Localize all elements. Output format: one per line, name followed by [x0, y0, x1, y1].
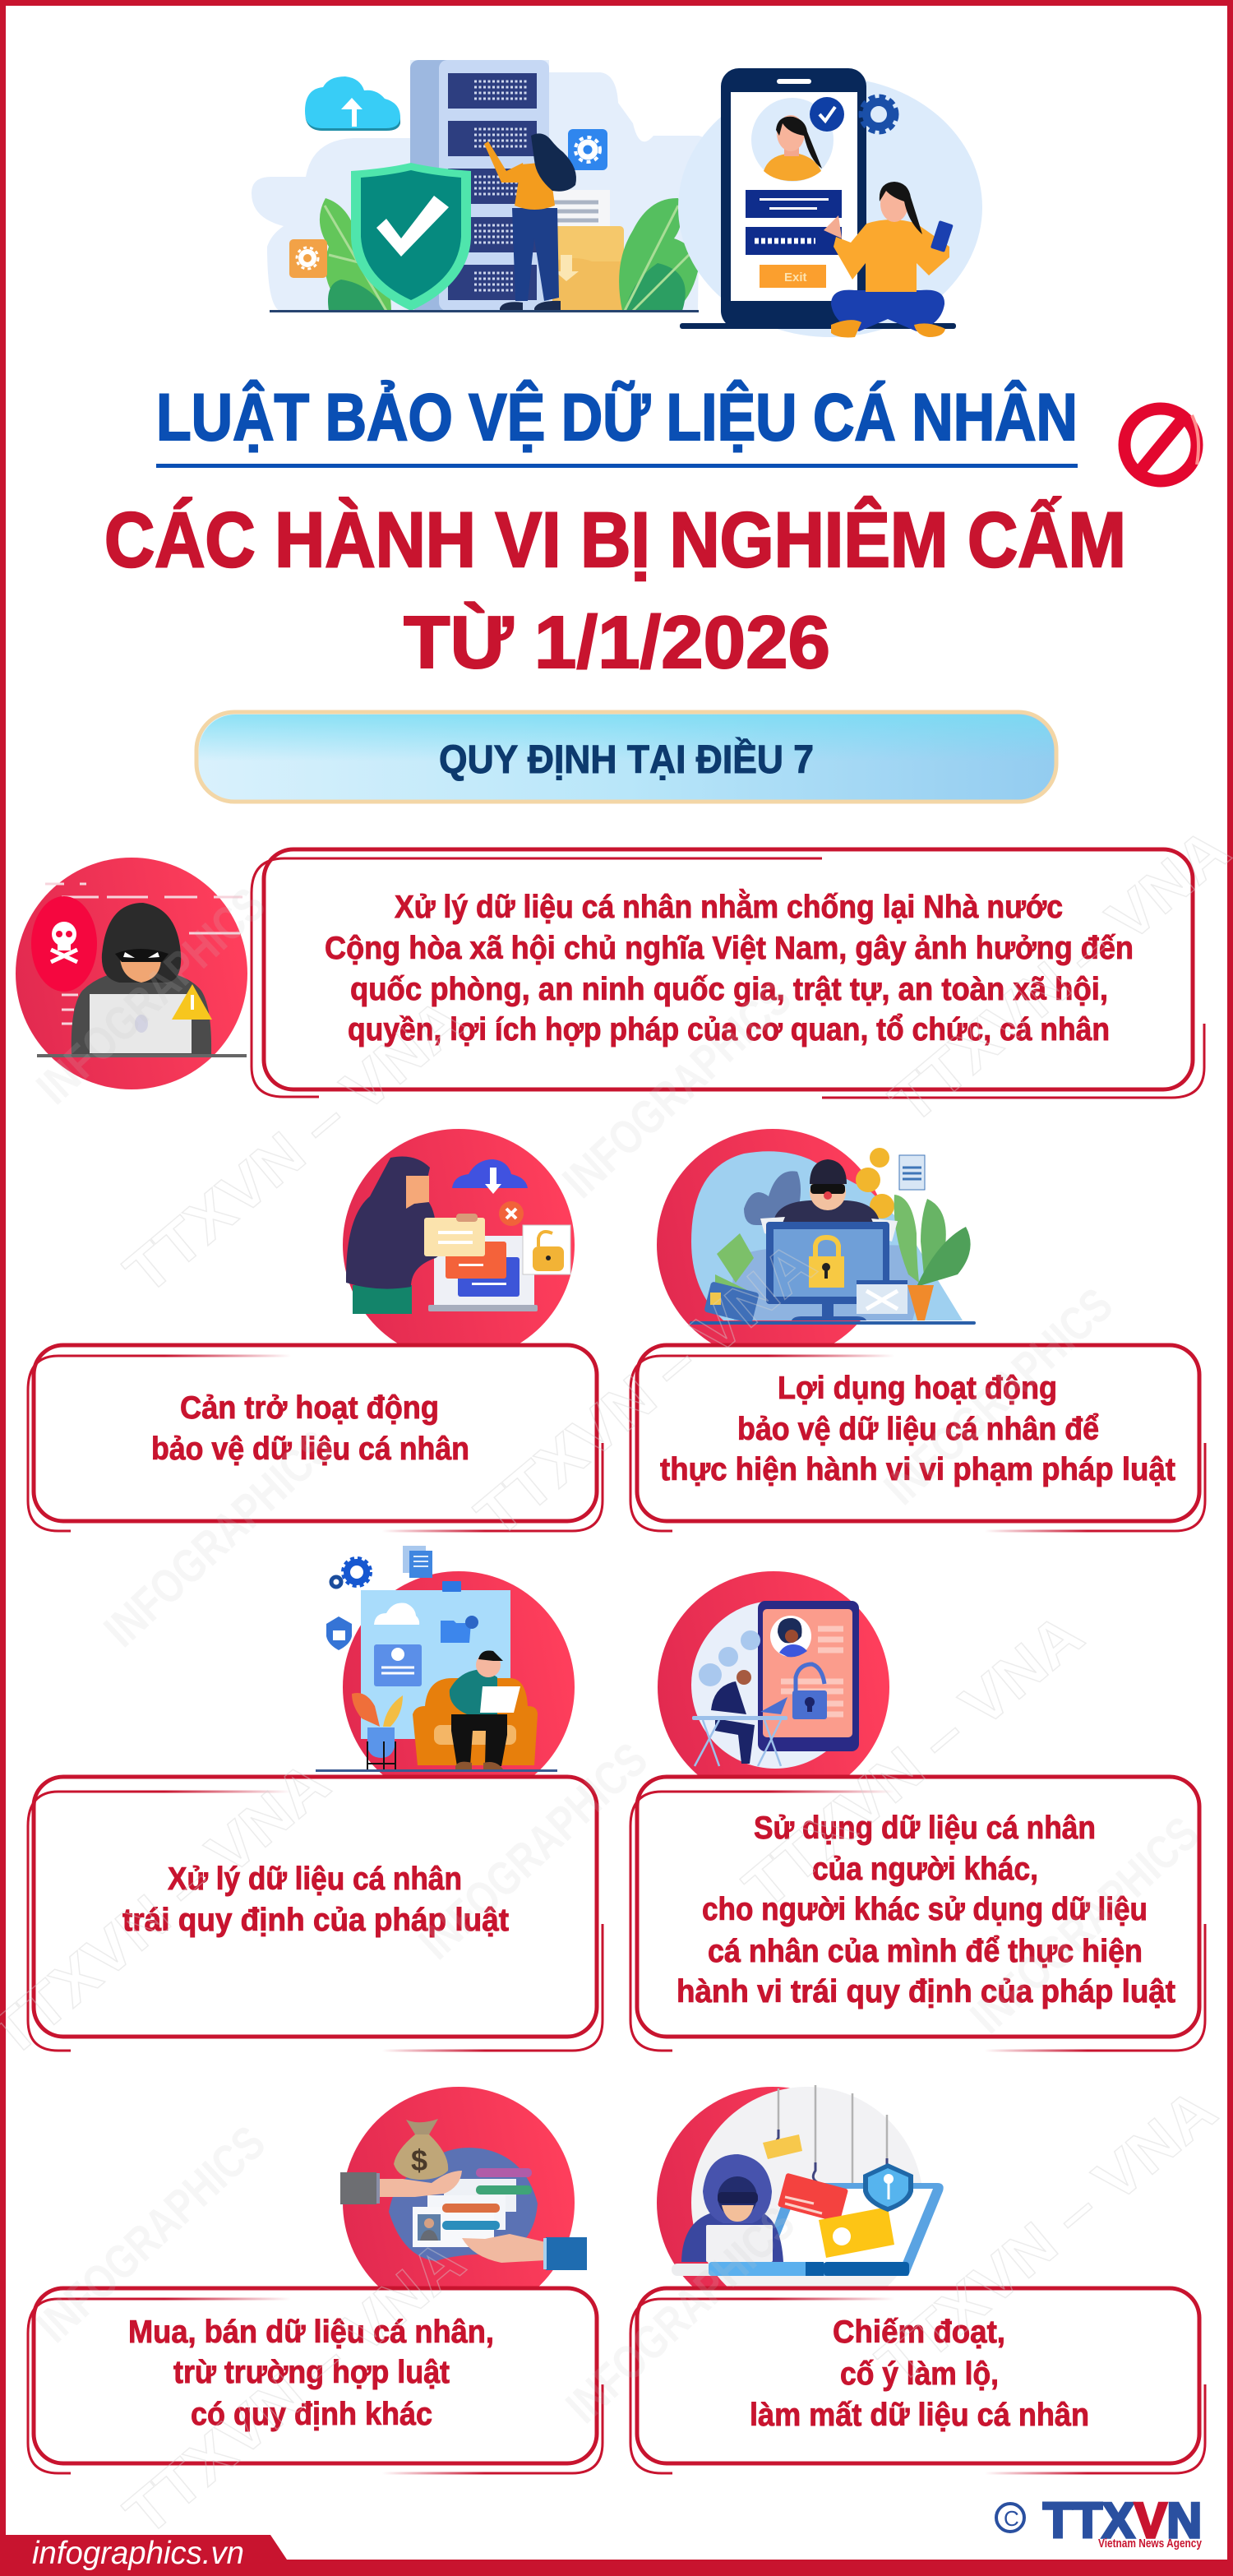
text block: trái quy định của pháp luật — [122, 1903, 509, 1938]
text block: Chiếm đoạt, — [833, 2315, 1005, 2350]
padlock — [815, 1237, 838, 1258]
skull badge — [31, 896, 97, 992]
exit button — [760, 265, 826, 288]
plant in vase — [352, 1693, 403, 1770]
app icons — [699, 1663, 722, 1686]
crossbones window — [857, 1280, 907, 1314]
phone with login screen — [721, 68, 866, 329]
coins — [870, 1148, 889, 1168]
dark plant — [744, 1171, 801, 1225]
panel: data against the State — [252, 849, 1204, 1098]
avatar — [770, 1616, 811, 1657]
server rack — [410, 60, 549, 311]
leaves right — [619, 198, 698, 311]
watermarks: TTXVN – VNA — [112, 2227, 477, 2548]
text block: quyền, lợi ích hợp pháp của cơ quan, tổ chức, cá nhân — [348, 1012, 1110, 1048]
watermarks — [0, 815, 1233, 2548]
pill: article reference: QUY ĐỊNH TẠI ĐIỀU 7 — [439, 738, 814, 782]
text block — [325, 889, 1134, 1048]
envelope — [763, 2134, 802, 2159]
text block — [677, 1811, 1175, 2009]
desk band — [672, 2264, 721, 2276]
icon: hacker with laptop — [16, 858, 247, 1089]
seated woman — [824, 182, 954, 337]
folder — [441, 1621, 471, 1643]
documents — [403, 1546, 426, 1573]
person — [711, 1681, 746, 1714]
text block: cho người khác sử dụng dữ liệu — [702, 1892, 1148, 1927]
watermarks: TTXVN – VNA — [112, 985, 477, 1306]
logo: TTXVN copyright: TTXVN — [1043, 2493, 1202, 2548]
text block: trừ trường hợp luật — [173, 2355, 450, 2390]
text block — [128, 2315, 494, 2432]
base bar — [680, 323, 956, 329]
cloud download — [452, 1159, 528, 1188]
text block — [151, 1390, 469, 1467]
panel: using others' personal data — [630, 1777, 1205, 2051]
hooded person — [353, 1285, 412, 1314]
text block: có quy định khác — [191, 2397, 432, 2432]
text block: bảo vệ dữ liệu cá nhân — [151, 1431, 469, 1467]
icon: verified check — [810, 97, 844, 132]
sofa — [413, 1678, 538, 1765]
icon: thief behind locked monitor — [657, 1129, 976, 1361]
user card — [374, 1644, 422, 1686]
tags — [476, 2168, 532, 2177]
gears — [347, 1562, 367, 1582]
monitor — [766, 1222, 889, 1320]
watermarks: INFOGRAPHICS — [95, 1420, 343, 1658]
hacker — [681, 2154, 783, 2262]
panel: appropriating and leaking data — [630, 2288, 1205, 2473]
exit button: Exit — [784, 271, 807, 284]
text block: hành vi trái quy định của pháp luật — [677, 1974, 1175, 2009]
login field — [746, 190, 842, 218]
text block: Mua, bán dữ liệu cá nhân, — [128, 2315, 494, 2350]
right hand — [462, 2234, 546, 2263]
small card — [442, 1581, 461, 1592]
money bag: $ — [411, 2144, 427, 2177]
text block: làm mất dữ liệu cá nhân — [750, 2398, 1089, 2433]
credit card — [778, 2173, 848, 2222]
text block: Xử lý dữ liệu cá nhân — [168, 1861, 462, 1897]
man — [450, 1650, 520, 1769]
icon: phishing hacker — [657, 2085, 944, 2319]
watermarks: INFOGRAPHICS — [556, 2196, 805, 2434]
heading: prohibited acts: CÁC HÀNH VI BỊ NGHIÊM CẤM — [104, 496, 1126, 584]
panel: abusing data protection activities — [630, 1345, 1205, 1531]
avatar of woman — [751, 98, 834, 182]
thief — [774, 1159, 880, 1222]
heading: effective date: TỪ 1/1/2026 — [404, 601, 830, 684]
text block: thực hiện hành vi vi phạm pháp luật — [660, 1452, 1175, 1487]
card — [704, 1281, 760, 1324]
plants — [894, 1195, 919, 1283]
icon: man on sofa with cloud data — [316, 1546, 575, 1803]
text block — [122, 1861, 509, 1938]
x badge — [499, 1201, 524, 1226]
hook lines — [778, 2085, 887, 2187]
key shield — [863, 2163, 913, 2212]
title: law name: LUẬT BẢO VỆ DỮ LIỆU CÁ NHÂN — [156, 380, 1078, 455]
watermarks: INFOGRAPHICS — [875, 1278, 1123, 1515]
text block: Cộng hòa xã hội chủ nghĩa Việt Nam, gây ảnh hưởng đến — [325, 931, 1134, 966]
text block: bảo vệ dữ liệu cá nhân để — [737, 1412, 1099, 1447]
text block — [750, 2315, 1089, 2433]
pill: article reference — [196, 712, 1056, 802]
watermarks: INFOGRAPHICS — [553, 971, 801, 1209]
open padlock — [792, 1664, 827, 1719]
hero illustration — [252, 60, 982, 337]
gloves — [760, 1217, 898, 1242]
shield — [326, 1616, 352, 1650]
text block: cố ý làm lộ, — [840, 2356, 999, 2392]
icon: hooded person with windows — [343, 1129, 575, 1361]
password field — [746, 227, 842, 255]
icon: person at desk with tablet — [658, 1571, 889, 1803]
text block: Cản trở hoạt động — [180, 1390, 439, 1426]
text block: cá nhân của mình để thực hiện — [708, 1934, 1143, 1969]
text block: quốc phòng, an ninh quốc gia, trật tự, an toàn xã hội, — [350, 972, 1108, 1007]
watermarks: TTXVN – VNA — [877, 815, 1233, 1136]
icon: dark blue gear — [861, 96, 897, 132]
text block: của người khác, — [812, 1852, 1038, 1887]
laptop screen — [756, 2183, 944, 2276]
panel: unlawful processing — [28, 1777, 603, 2051]
text block: Sử dụng dữ liệu cá nhân — [754, 1811, 1096, 1846]
watermarks: TTXVN – VNA — [731, 1600, 1096, 1922]
text block: Lợi dụng hoạt động — [778, 1371, 1057, 1406]
ground line — [270, 310, 699, 312]
watermarks: INFOGRAPHICS — [27, 877, 275, 1115]
logo: TTXVN copyright: Vietnam News Agency — [1098, 2537, 1203, 2551]
watermarks: TTXVN – VNA — [864, 2075, 1229, 2397]
icon: cloud upload — [305, 76, 400, 131]
cloud — [374, 1603, 419, 1625]
lock card — [523, 1225, 570, 1274]
pot — [907, 1285, 934, 1320]
icon: prohibited sign — [1124, 409, 1198, 481]
panel: buying and selling data — [28, 2288, 603, 2473]
leaves left — [320, 198, 391, 311]
document and folder — [549, 190, 624, 311]
icon: gear tile blue — [568, 129, 607, 170]
text block: Xử lý dữ liệu cá nhân nhằm chống lại Nhà nước — [395, 889, 1063, 925]
data cards — [444, 2179, 516, 2212]
money — [717, 1233, 754, 1283]
money bag — [394, 2119, 448, 2180]
id card — [819, 2207, 894, 2258]
footer band with site name: infographics.vn — [32, 2536, 244, 2571]
logo: TTXVN copyright: C — [1004, 2506, 1019, 2531]
watermarks: INFOGRAPHICS — [27, 2116, 275, 2353]
text block — [660, 1371, 1175, 1487]
watermarks: TTXVN – VNA — [463, 1228, 828, 1550]
icon: gear tile orange — [289, 239, 327, 278]
footer band with site name — [0, 2535, 1233, 2576]
panel: obstructing data protection — [28, 1345, 603, 1531]
pale blue disc behind phone — [678, 77, 982, 337]
document — [899, 1155, 925, 1190]
pale background blobs — [252, 60, 713, 311]
woman at server — [484, 133, 576, 311]
icon: security shield — [351, 163, 471, 311]
icon: hands exchanging money for data — [340, 2087, 587, 2319]
left hand — [376, 2171, 462, 2197]
watermarks: INFOGRAPHICS — [409, 1732, 658, 1970]
